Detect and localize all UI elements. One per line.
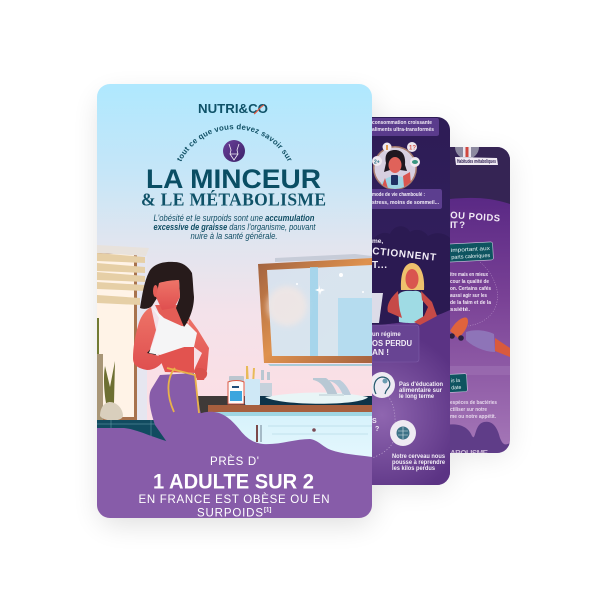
teal callout [447,242,493,262]
soft drop shadow [100,96,510,524]
body paragraph [450,272,492,313]
question fragment: ? [375,426,379,433]
lower paragraph: ctiliser sur notre [450,407,487,413]
tape measure [167,368,199,413]
left arm [133,307,165,370]
ear [153,285,158,297]
illustration: pale object [372,293,383,323]
label: metabolic badge: Habitudes métaboliques [457,159,496,165]
teal callout 2: is la [451,378,460,384]
illustration: plant in vase [100,361,123,420]
text: cerveau: Notre cerveau nous [392,454,446,460]
illustration: window with blinds [97,245,149,422]
dark gap [147,343,156,355]
text: education: le long terme [399,394,435,400]
dotted connector [372,396,395,458]
title: LA MINCEUR [146,164,321,194]
body paragraph: cour la qualité de [450,279,489,285]
right arm [187,315,209,380]
text: cerveau: les kilos perdus [392,466,436,472]
face [156,280,180,310]
panel: regime: OS PERDU [372,339,412,348]
lower paragraph: espèces de bactéries [450,400,497,406]
illustration: mirror [258,254,372,366]
panel: regime: AN ! [372,348,389,357]
teal callout 2 [450,373,468,393]
avatar fragment [455,147,479,158]
body paragraph: itre mais en mieux [450,272,489,278]
hand [195,368,207,380]
illustration: woman doing exercise [449,318,510,357]
light band [450,366,510,375]
footer text: ABOLISME [450,449,489,458]
question fragment [372,418,379,431]
statistic callout: SURPOIDS [197,508,263,520]
bottom wave [445,422,510,453]
body paragraph: aussi agir sur les [450,293,487,299]
illustration: toothbrush cup [245,366,272,405]
arched tagline: tout ce que vous devez savoir sur [177,124,292,162]
icon: brain [390,420,416,446]
subtitle: & LE MÉTABOLISME [141,190,326,210]
question fragment: S [372,418,377,425]
lower purple area [372,306,450,485]
body paragraph: de la faim et de la [450,300,492,306]
midriff [158,347,196,373]
panel: regime: un régime [372,332,401,338]
illustration: woman measuring waist [133,262,209,445]
body paragraph: ssiété. [450,307,471,313]
icon: body silhouette [223,140,245,162]
chest [155,305,190,326]
illustration: teal tiled wall [97,396,240,442]
text: education [399,382,443,400]
heading fragment: IT ? [450,220,465,231]
statistic callout [138,455,330,520]
heading fragment [372,240,436,268]
teal callout: important aux [451,246,490,254]
clouds [372,226,450,326]
dark top band [450,147,510,204]
statistic callout: [1] [264,508,271,514]
illustration: woman with phone in round avatar [373,146,417,192]
heading fragment: T... [372,260,387,271]
strip: mode de vie: mode de vie chamboulé : [372,192,425,198]
dotted arc [468,262,498,326]
illustration: supplement pouch [228,376,244,404]
intro paragraph: L'obésité et le surpoids sont une accumulation [154,213,315,224]
statistic callout: EN FRANCE EST OBÈSE OU EN [138,493,330,506]
strip: mode de vie [372,189,442,209]
teal callout 2: date [451,385,462,391]
leggings [149,373,205,445]
status bubbles: 1? [409,146,416,152]
heading fragment: me, [372,238,383,245]
status bubbles: 2+ [374,160,380,166]
logo: NUTRI&CO [198,102,268,116]
text: education: Pas d'éducation [399,382,443,388]
panel: middle card [372,117,450,485]
text: cerveau [392,454,446,472]
strip: consommation: aliments ultra-transformés [372,127,434,133]
heading fragment: OU POIDS [450,210,500,224]
statistic callout: 1 ADULTE SUR 2 [153,470,314,494]
strip: consommation: consommation croissante [372,120,432,126]
infographic stack of three cards [92,84,514,532]
status bubbles [372,142,420,167]
lower paragraph: me ou notre appétit. [450,414,496,420]
panel: back card [450,147,510,453]
intro paragraph: excessive de graisse dans l'organisme, pouvant [154,222,316,233]
statistic callout: PRÈS D' [210,455,259,468]
intro paragraph: nuire à la santé générale. [190,231,278,242]
text: cerveau: pousse à reprendre [392,460,446,466]
white top [149,307,197,355]
strip: consommation [372,118,439,136]
lower paragraph [450,400,497,420]
illustration: counter and sink [208,378,372,457]
illustration: blond woman [388,263,437,325]
icon: head [372,372,395,398]
heading fragment: CTIONNENT [372,246,436,264]
teal callout: parts caloriques [451,253,491,261]
panel: front card [97,84,372,518]
hair [140,262,194,327]
purple wave [97,412,372,518]
body paragraph: on. Certains cafés [450,286,491,292]
label: metabolic badge [455,157,498,165]
strip: mode de vie: stress, moins de sommeil... [372,200,439,206]
text: education: alimentaire sur [399,388,443,394]
panel: regime [372,325,419,362]
intro paragraph [154,213,316,242]
